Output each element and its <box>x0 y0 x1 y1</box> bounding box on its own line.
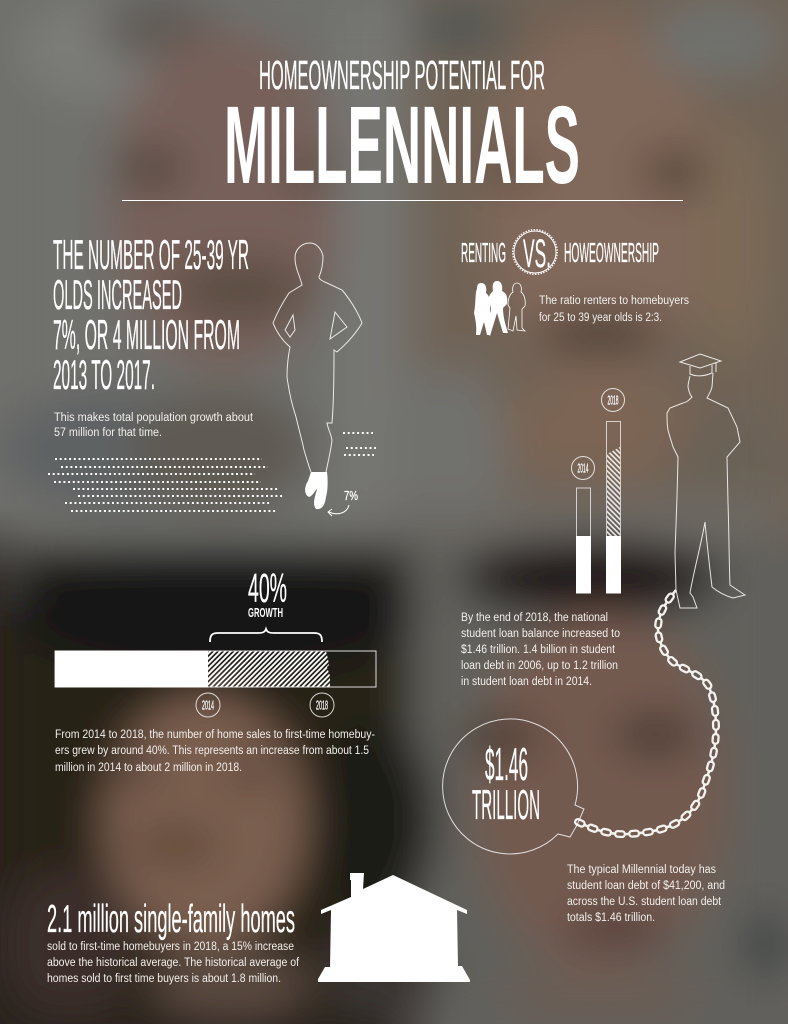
text: renter ratio: for 25 to 39 year olds is 2:3. <box>539 312 662 324</box>
woman bottom-left <box>15 545 415 675</box>
chain <box>574 589 720 838</box>
title <box>122 52 683 207</box>
text: student loan balance <box>461 612 620 688</box>
text: 7%, OR 4 MILLION FROM <box>53 311 240 358</box>
white feet <box>305 472 328 509</box>
text: population growth <box>54 412 254 439</box>
text: THE NUMBER OF 25-39 YR <box>53 231 249 278</box>
woman top-right <box>415 0 505 55</box>
icon: house <box>318 873 470 982</box>
woman silhouette with white 7% feet <box>273 243 362 509</box>
icon: three people ratio <box>474 281 525 336</box>
graduate silhouette <box>667 354 745 608</box>
text: typical millennial debt: totals $1.46 trillion. <box>567 912 655 924</box>
text: student loan balance: loan debt in 2006, up to 1.2 trillion <box>461 660 618 672</box>
description <box>47 941 300 985</box>
renting vs homeownership heading: RENTING <box>461 237 506 268</box>
text: home sales growth: million in 2014 to about 2 million in 2018. <box>55 762 242 774</box>
callout: 40% growth: GROWTH <box>248 606 283 620</box>
text: student loan balance: in student loan debt in 2014. <box>461 676 592 688</box>
text: typical millennial debt: student loan debt of $41,200, and <box>567 880 725 892</box>
text: renter ratio: The ratio renters to homebuyers <box>539 295 689 307</box>
callout: 40% growth <box>210 565 322 642</box>
bar: 2014: 2014 <box>578 460 588 476</box>
text: single-family homes <box>47 898 300 985</box>
headline: population increase: 2013 TO 2017. <box>53 351 155 398</box>
bar: 2018: 2018 <box>608 392 618 408</box>
graduation cap <box>680 354 721 376</box>
callout: 40% growth: 40% <box>248 565 287 611</box>
text: student loan balance: $1.46 trillion. 1.4 billion in student <box>461 644 616 656</box>
text: typical millennial debt: The typical Millennial today has <box>567 864 716 876</box>
ball and chain <box>442 589 720 854</box>
description: above the historical average. The historical average of <box>47 957 300 969</box>
man top-left <box>20 0 180 100</box>
text: home sales growth <box>55 729 375 774</box>
ball with total: TRILLION <box>472 781 540 828</box>
text: student loan balance: By the end of 2018, the national <box>461 612 608 624</box>
description: homes sold to first time buyers is about 1.8 million. <box>47 973 281 985</box>
text: population growth: 57 million for that time. <box>54 427 162 439</box>
man bottom-right <box>460 540 720 616</box>
headline: population increase <box>53 231 249 398</box>
label: 7% with arrow <box>328 488 358 516</box>
label: 7% with arrow: 7% <box>344 488 358 503</box>
description: sold to first-time homebuyers in 2018, a 15% increase <box>47 941 294 953</box>
text: student loan balance: student loan balance increased to <box>461 628 620 640</box>
renting vs homeownership heading <box>461 230 659 276</box>
text: home sales growth: ers grew by around 40%. This represents an increase from about 1.5 <box>55 745 369 757</box>
bar: 2014 <box>572 456 594 594</box>
brace <box>210 629 322 642</box>
dotted population rows <box>48 433 376 511</box>
year marker 2018 <box>310 693 334 717</box>
year marker 2014 <box>196 693 220 717</box>
text: 2.1 million single-family homes <box>47 898 295 941</box>
ball with total <box>443 719 584 854</box>
year marker 2018: 2018 <box>316 698 328 712</box>
text: home sales growth: From 2014 to 2018, the number of home sales to first-time homebuy- <box>55 729 375 741</box>
text: typical millennial debt <box>567 864 725 924</box>
text: typical millennial debt: across the U.S. student loan debt <box>567 896 722 908</box>
text: renter ratio <box>539 295 689 324</box>
chart: student loan bars <box>572 388 624 594</box>
year marker 2014: 2014 <box>202 698 214 712</box>
ball with total: $1.46 <box>485 738 528 790</box>
chart: home sales growth bar <box>55 650 376 717</box>
headline: population increase: OLDS INCREASED <box>53 271 182 318</box>
renting vs homeownership heading: VS. <box>523 232 551 276</box>
bar: 2018 <box>602 388 624 594</box>
text: population growth: This makes total population growth about <box>54 412 254 424</box>
